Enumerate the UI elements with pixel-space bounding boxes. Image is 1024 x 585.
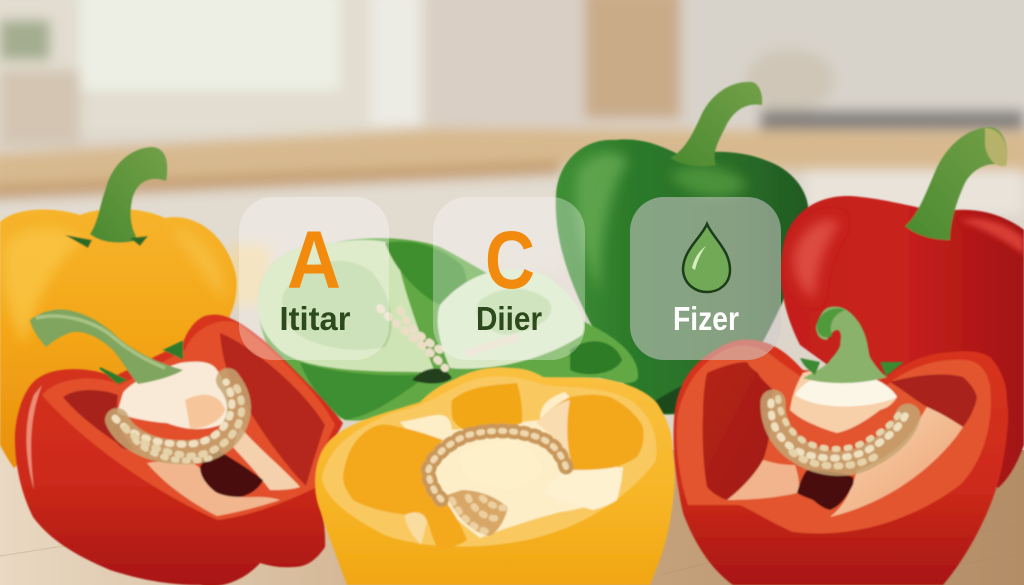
stem <box>90 147 167 243</box>
front center halved yellow pepper <box>315 367 675 585</box>
left cavity <box>703 362 773 500</box>
stem <box>30 309 183 384</box>
back right red pepper <box>781 127 1024 488</box>
label Diier: Diier <box>476 300 542 337</box>
white slab <box>543 467 623 510</box>
back green pepper <box>556 82 809 415</box>
badge: vitamin C <box>433 197 585 360</box>
seeds <box>117 380 239 452</box>
cavity <box>63 390 135 450</box>
icon: water drop <box>683 224 730 292</box>
core <box>790 370 897 433</box>
badge: vitamin A <box>239 197 389 360</box>
letter C: C <box>485 215 535 306</box>
front right halved red pepper <box>673 307 1008 585</box>
rim <box>42 321 335 520</box>
seeds <box>773 402 908 463</box>
right cavity <box>890 375 977 427</box>
back left yellow pepper <box>0 147 237 468</box>
cavities <box>343 424 467 548</box>
cream pith <box>400 392 622 538</box>
pith stub <box>405 512 427 545</box>
stem <box>670 82 762 166</box>
label Fizer: Fizer <box>673 300 739 337</box>
letter A: A <box>287 215 341 306</box>
halved green pepper <box>258 238 638 421</box>
seeds <box>380 308 445 368</box>
label Ititar: Ititar <box>280 300 351 337</box>
seeds <box>428 431 566 503</box>
core <box>117 362 228 429</box>
rim <box>677 346 991 534</box>
stem <box>803 307 887 383</box>
core <box>459 440 543 490</box>
stem <box>905 127 1007 240</box>
badge: fiber <box>630 197 781 360</box>
front left halved red pepper <box>15 309 343 585</box>
flesh <box>727 460 799 500</box>
